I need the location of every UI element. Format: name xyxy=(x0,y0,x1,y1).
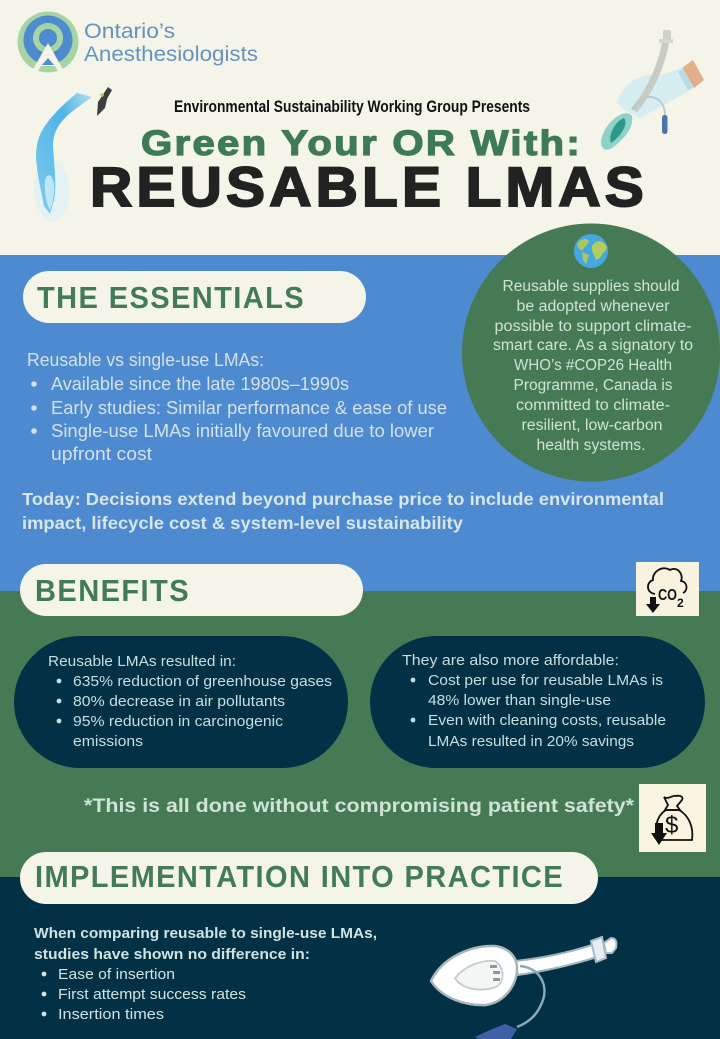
panel: affordability: Even with cleaning costs, reusable xyxy=(428,712,666,729)
panel: environmental results: 635% reduction of greenhouse gases xyxy=(73,673,332,690)
text: reusable vs single-use history: upfront cost xyxy=(51,444,152,464)
heading pill: benefits xyxy=(20,564,363,616)
text: presenter line: Environmental Sustainability Working Group Presents xyxy=(174,97,530,116)
callout: patient safety: *This is all done without compromising patient safety* xyxy=(84,795,634,817)
callout circle: climate-smart care: committed to climate- xyxy=(516,397,670,414)
text: no difference findings: First attempt success rates xyxy=(58,986,246,1003)
callout circle: climate-smart care: WHO’s #COP26 Health xyxy=(514,357,672,374)
callout: today's decisions: impact, lifecycle cost & system-level sustainability xyxy=(22,513,463,533)
panel: environmental results xyxy=(14,636,348,768)
logo: Ontario's Anesthesiologists: Anesthesiologists xyxy=(84,42,258,66)
panel: affordability: LMAs resulted in 20% savings xyxy=(428,733,634,750)
heading pill: implementation: IMPLEMENTATION INTO PRACTICE xyxy=(35,859,564,894)
text: no difference findings: When comparing reusable to single-use LMAs, xyxy=(34,925,377,942)
icon: CO2 cloud with down arrow: CO xyxy=(658,587,677,604)
title: Reusable LMAs: REUSABLE LMAS xyxy=(90,155,648,218)
title: Green Your OR With: Green Your OR With: xyxy=(141,124,582,163)
icon: blue single-use LMA xyxy=(34,87,112,222)
panel: essentials background xyxy=(0,255,720,591)
icon: money bag with down arrow xyxy=(639,784,706,852)
text: reusable vs single-use history: Available since the late 1980s–1990s xyxy=(51,374,349,394)
callout: today's decisions xyxy=(22,489,664,533)
panel: environmental results: emissions xyxy=(73,733,143,750)
heading pill: the essentials: THE ESSENTIALS xyxy=(37,280,305,315)
callout circle: climate-smart care: be adopted whenever xyxy=(516,298,670,315)
heading pill: benefits: BENEFITS xyxy=(35,573,190,608)
panel: implementation background xyxy=(0,877,720,1039)
callout: today's decisions: Today: Decisions extend beyond purchase price to include environmental xyxy=(22,489,664,509)
panel: affordability: They are also more affordable: xyxy=(402,652,619,669)
logo: Ontario's Anesthesiologists: Ontario’s xyxy=(84,19,175,43)
callout circle: climate-smart care: Programme, Canada is xyxy=(514,377,673,394)
icon: money bag with down arrow: $ xyxy=(665,812,678,839)
icon: CO2 cloud with down arrow: 2 xyxy=(677,596,684,610)
text: reusable vs single-use history: Early studies: Similar performance & ease of use xyxy=(51,398,447,418)
callout circle: climate-smart care: resilient, low-carbon xyxy=(522,417,662,434)
panel: affordability: Cost per use for reusable LMAs is xyxy=(428,672,663,689)
text: reusable vs single-use history: Reusable vs single-use LMAs: xyxy=(27,350,264,370)
text: reusable vs single-use history: Single-use LMAs initially favoured due to lower xyxy=(51,421,434,441)
callout circle: climate-smart care: possible to support climate- xyxy=(494,318,692,335)
panel: environmental results: Reusable LMAs resulted in: xyxy=(48,653,236,670)
text: no difference findings xyxy=(34,925,377,1023)
icon: gloved hand holding LMA xyxy=(601,30,704,150)
heading pill: the essentials xyxy=(23,271,366,323)
callout circle: climate-smart care: Reusable supplies should xyxy=(502,278,680,295)
panel: benefits xyxy=(14,562,706,852)
panel: environmental results: 80% decrease in air pollutants xyxy=(73,693,285,710)
callout circle: climate-smart care: smart care. As a signatory to xyxy=(493,337,693,354)
text: reusable vs single-use history xyxy=(27,350,447,464)
panel: affordability: 48% lower than single-use xyxy=(428,692,611,709)
text: no difference findings: Ease of insertion xyxy=(58,966,175,983)
text: no difference findings: studies have shown no difference in: xyxy=(34,946,310,963)
panel: implementation into practice xyxy=(20,852,616,1039)
icon: globe xyxy=(574,234,608,268)
logo: Ontario's Anesthesiologists xyxy=(18,12,258,72)
callout circle: climate-smart care: health systems. xyxy=(536,437,646,454)
panel: environmental results: 95% reduction in carcinogenic xyxy=(73,713,284,730)
panel: header background xyxy=(0,0,720,255)
heading pill: implementation xyxy=(20,852,598,904)
icon: CO2 cloud with down arrow xyxy=(636,562,699,616)
text: no difference findings: Insertion times xyxy=(58,1006,164,1023)
panel: the essentials xyxy=(22,224,720,533)
panel: affordability xyxy=(370,636,705,768)
panel: benefits background xyxy=(0,591,720,877)
callout circle: climate-smart care xyxy=(462,224,720,482)
icon: white reusable LMA xyxy=(431,937,616,1039)
